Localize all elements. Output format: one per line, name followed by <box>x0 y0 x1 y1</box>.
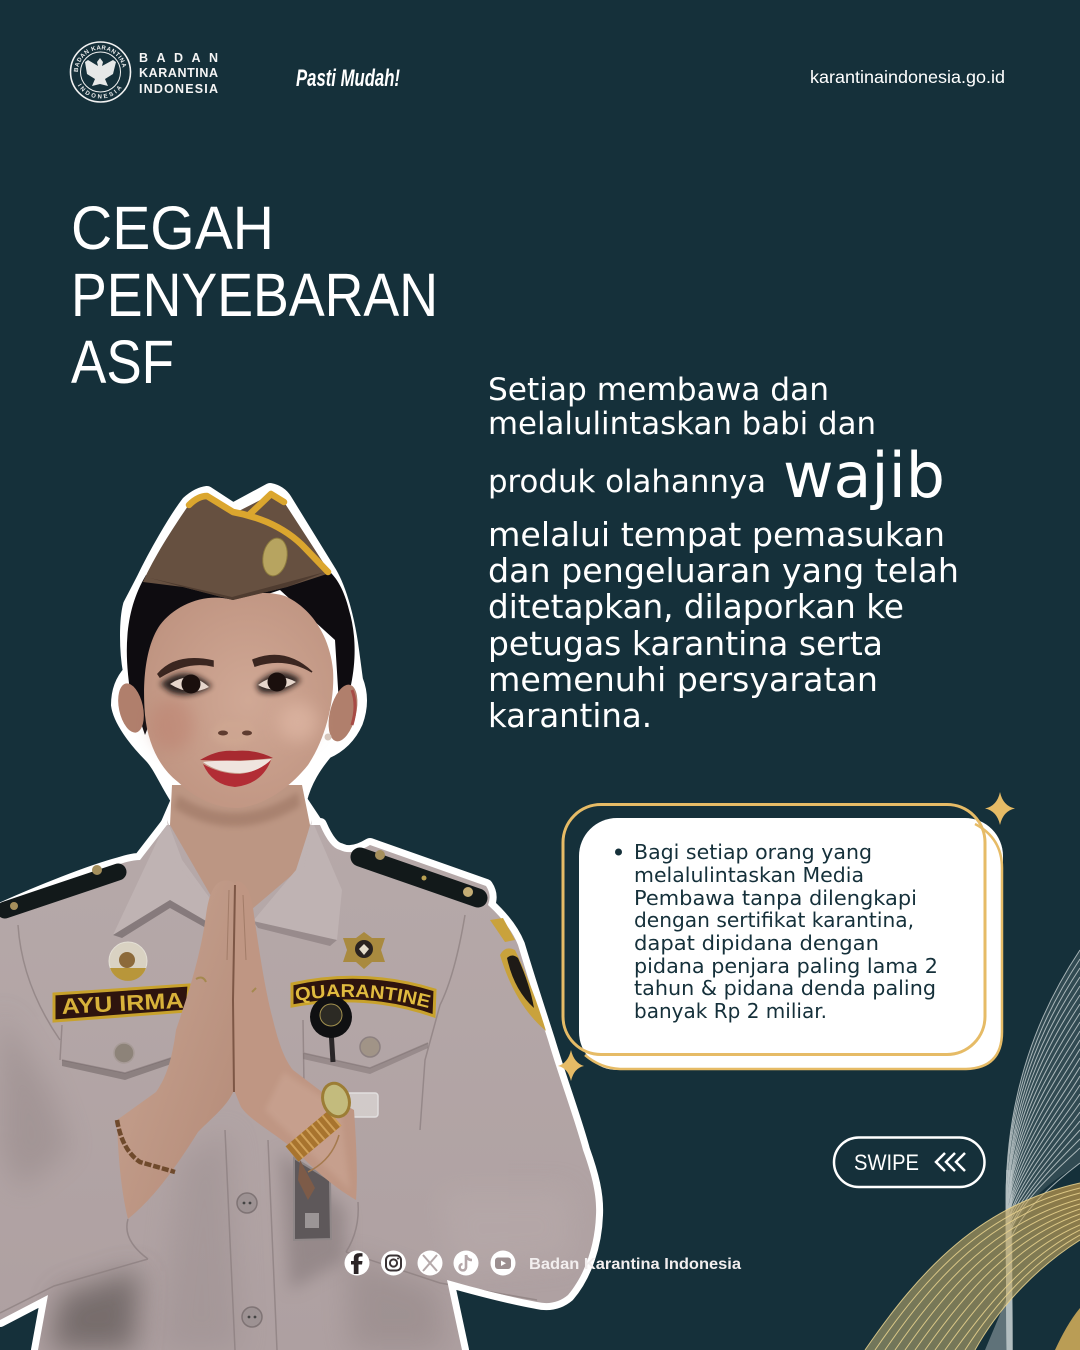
callout text: tahun & pidana denda paling <box>634 976 936 1000</box>
body paragraph: produk olahannya <box>488 464 766 500</box>
callout text: dengan sertifikat karantina, <box>634 908 914 932</box>
tagline: Pasti Mudah! <box>296 65 400 92</box>
logo wordmark: BADAN <box>139 51 218 65</box>
body paragraph: wajib <box>783 439 945 512</box>
pocket buttons <box>114 1037 380 1063</box>
pocket flap shadow right <box>303 1043 428 1074</box>
social media row <box>344 1250 741 1276</box>
decorative wave lines: white fan <box>1006 950 1080 1350</box>
eye right <box>256 672 301 693</box>
logo wordmark: KARANTINA <box>139 66 218 80</box>
callout text: melalulintaskan Media <box>634 863 864 887</box>
swipe button <box>834 1138 984 1187</box>
title: ASF <box>71 328 174 396</box>
callout text: banyak Rp 2 miliar. <box>634 999 827 1023</box>
cap gold piping <box>189 494 328 572</box>
shirt buttons <box>237 1193 262 1327</box>
sticker outline <box>0 490 596 1350</box>
title <box>71 194 438 396</box>
body paragraph: memenuhi persyaratan <box>488 660 878 699</box>
callout text <box>634 840 938 1023</box>
icon: X <box>418 1250 442 1276</box>
sparkle: bottom left <box>558 1050 584 1081</box>
neck <box>170 785 310 915</box>
callout bullet <box>615 848 622 856</box>
sparkle: top right <box>985 792 1015 825</box>
cheek highlight <box>278 702 318 742</box>
left bracelet <box>117 1120 175 1172</box>
logo seal: INDONESIA <box>78 84 122 98</box>
photo figure: quarantine officer <box>0 483 604 1350</box>
name tape: QUARANTINE: QUARANTINE <box>296 984 431 1008</box>
decorative wave band: white stem <box>985 1170 1013 1350</box>
logo: Badan Karantina Indonesia <box>70 41 218 103</box>
callout text: dapat dipidana dengan <box>634 931 879 955</box>
callout text: pidana penjara paling lama 2 <box>634 954 938 978</box>
eye left <box>160 673 212 695</box>
decorative wave band: gold fill <box>865 1183 1080 1350</box>
lips <box>200 751 273 787</box>
cap pin <box>260 536 290 578</box>
callout gold frame <box>563 804 985 1054</box>
body paragraph: karantina. <box>488 696 652 735</box>
body paragraph: dan pengeluaran yang telah <box>488 551 959 590</box>
name tape: AYU IRMA <box>54 985 189 1021</box>
medal <box>109 942 147 981</box>
ears <box>114 681 363 744</box>
logo seal <box>70 41 132 103</box>
uniform shirt <box>0 820 610 1350</box>
ID card <box>294 1093 378 1240</box>
body paragraph: melalui tempat pemasukan <box>488 515 945 554</box>
neck shadow <box>174 792 300 827</box>
swipe button: SWIPE <box>854 1150 919 1175</box>
logo seal: BADAN KARANTINA <box>74 45 126 72</box>
epaulette right <box>360 850 478 898</box>
shirt shading <box>0 1010 575 1350</box>
callout text: Pembawa tanpa dilengkapi <box>634 886 917 910</box>
hair <box>127 570 355 735</box>
decorative wave corner: gold <box>1055 1308 1080 1350</box>
cheek blush <box>150 699 194 751</box>
body paragraph: petugas karantina serta <box>488 624 883 663</box>
logo wordmark: INDONESIA <box>139 82 218 96</box>
body paragraph: ditetapkan, dilaporkan ke <box>488 587 904 626</box>
decorative wave fill: white fan <box>1007 950 1080 1230</box>
eyebrows <box>158 656 312 677</box>
collar <box>113 820 342 946</box>
collar top <box>167 820 312 921</box>
body paragraph: melalulintaskan babi dan <box>488 406 876 442</box>
social handle: Badan Karantina Indonesia <box>529 1256 741 1273</box>
icon: facebook <box>344 1250 370 1276</box>
star badge <box>343 932 385 969</box>
name tape: QUARANTINE <box>290 976 436 1018</box>
nose <box>211 720 256 746</box>
praying hands <box>117 880 357 1219</box>
icon: tiktok <box>454 1250 478 1276</box>
logo wordmark <box>139 51 218 96</box>
icon: youtube <box>490 1250 516 1276</box>
body paragraph: Setiap membawa dan <box>488 372 829 408</box>
facial features <box>150 656 318 787</box>
title: CEGAH <box>71 194 274 262</box>
garrison cap <box>143 494 330 600</box>
callout box <box>563 804 1003 1070</box>
shoulder patches <box>490 918 546 1031</box>
callout text: Bagi setiap orang yang <box>634 840 872 864</box>
icon: instagram <box>381 1250 406 1276</box>
decorative wave lines: gold <box>865 1183 1080 1350</box>
body paragraph <box>488 372 959 735</box>
name tape: AYU IRMA: AYU IRMA <box>61 988 184 1019</box>
title: PENYEBARAN <box>71 261 438 329</box>
pocket flap shadow left <box>62 1058 171 1080</box>
sleeve seams and placket <box>0 915 537 1350</box>
epaulette left <box>5 865 118 910</box>
wrist watch <box>292 1080 354 1172</box>
website: karantinaindonesia.go.id <box>810 67 1005 87</box>
badge reel <box>310 996 352 1062</box>
swipe chevrons <box>936 1153 965 1171</box>
callout white panel <box>579 818 1003 1070</box>
callout gold edge <box>585 824 1002 1069</box>
face <box>144 593 333 808</box>
